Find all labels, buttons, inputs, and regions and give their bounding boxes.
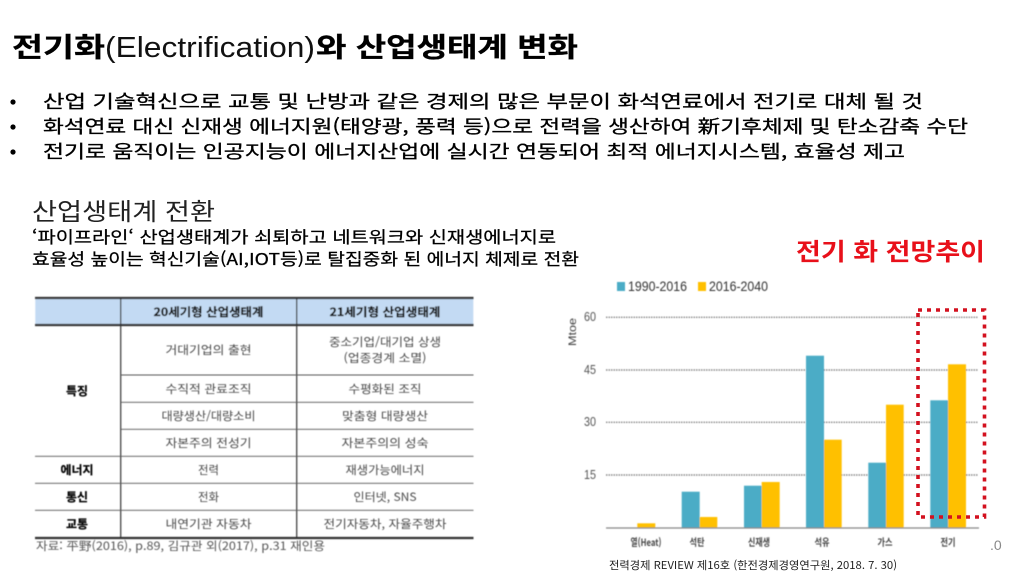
table row headings: 교통 (66, 516, 88, 532)
title: 와 산업생태계 변화 (316, 26, 578, 65)
title: 전기화 (12, 26, 105, 65)
table column: 20th century: 대량생산/대량소비 (162, 408, 256, 424)
table column: 20th century: 거대기업의 출현 (166, 342, 252, 358)
table column: 20th century: 전화 (198, 489, 219, 505)
table column: 20th century: 전력 (198, 462, 219, 478)
description text (32, 224, 579, 270)
table column: 21st century: 자본주의의 성숙 (342, 435, 428, 451)
table column: 21st century: 맞춤형 대량생산 (342, 408, 428, 424)
bullet list: 전기로 움직이는 인공지능이 에너지산업에 실시간 연동되어 최적 에너지시스템, 효율성 제고 (43, 138, 905, 164)
chart legend (617, 278, 768, 294)
y axis ticks: 15 (584, 467, 596, 482)
x axis category labels: 열(Heat) (630, 534, 662, 549)
series: 2016-2040 bars (637, 364, 966, 528)
table column headings (154, 304, 440, 320)
table row headings: 특징 (66, 383, 88, 399)
table source note: 자료: 平野(2016), p.89, 김규관 외(2017), p.31 재인용 (36, 538, 325, 554)
table column: 21st century (324, 334, 447, 532)
table column: 21st century: 인터넷, SNS (354, 489, 417, 505)
title (12, 26, 578, 65)
y axis title: Mtoe (567, 318, 579, 346)
table row headings: 통신 (66, 489, 88, 505)
table column headings: 21세기형 산업생태계 (330, 304, 440, 320)
subheading: 산업생태계 전환 (32, 192, 215, 227)
panel: ecosystem comparison table (35, 298, 474, 554)
table column: 21st century: 재생가능에너지 (346, 462, 424, 478)
table column: 20th century (162, 342, 256, 532)
table column: 20th century: 내연기관 자동차 (166, 516, 252, 532)
y axis ticks: 60 (584, 309, 596, 324)
y axis ticks: 30 (584, 414, 596, 429)
bullet list: 화석연료 대신 신재생 에너지원(태양광, 풍력 등)으로 전력을 생산하여 新기후체제 및 탄소감축 수단 (43, 113, 968, 139)
table column: 21st century: 수평화된 조직 (348, 381, 422, 397)
x axis category labels: 전기 (940, 534, 956, 549)
table column headings: 20세기형 산업생태계 (154, 304, 264, 320)
bar chart (567, 278, 979, 549)
bullet list: 산업 기술혁신으로 교통 및 난방과 같은 경제의 많은 부문이 화석연료에서 전기로 대체 될 것 (43, 88, 923, 114)
table column: 21st century: 중소기업/대기업 상생 (329, 334, 441, 350)
y axis ticks: 45 (584, 362, 596, 377)
description text: 효율성 높이는 혁신기술(AI,IOT등)로 탈집중화 된 에너지 체제로 전환 (32, 246, 579, 270)
x axis category labels: 신재생 (748, 534, 770, 549)
chart legend: 1990-2016 (628, 278, 687, 294)
x axis category labels: 석탄 (690, 534, 704, 549)
title: (Electrification) (105, 32, 315, 64)
chart heading: 전기 화 전망추이 (796, 232, 985, 267)
description text: ‘파이프라인‘ 산업생태계가 쇠퇴하고 네트워크와 신재생에너지로 (32, 224, 556, 248)
table column: 20th century: 수직적 관료조직 (166, 381, 252, 397)
table row headings (60, 383, 94, 532)
chart legend: 2016-2040 (709, 278, 768, 294)
page number fragment: .0 (990, 537, 1002, 553)
table header band (35, 298, 473, 325)
table column: 21st century: (업종경계 소멸) (344, 350, 426, 366)
table column: 21st century: 전기자동차, 자율주행차 (324, 516, 447, 532)
callout: electricity highlight box (918, 310, 984, 517)
x axis category labels: 가스 (878, 534, 892, 549)
chart source note: 전력경제 REVIEW 제16호 (한전경제경영연구원, 2018. 7. 30) (609, 557, 897, 573)
x axis category labels (630, 534, 956, 549)
table column: 20th century: 자본주의 전성기 (166, 435, 252, 451)
y axis ticks (584, 309, 596, 482)
bullet list (10, 88, 968, 164)
x axis category labels: 석유 (814, 534, 830, 549)
table row headings: 에너지 (60, 462, 94, 478)
series: 1990-2016 bars (682, 356, 948, 528)
